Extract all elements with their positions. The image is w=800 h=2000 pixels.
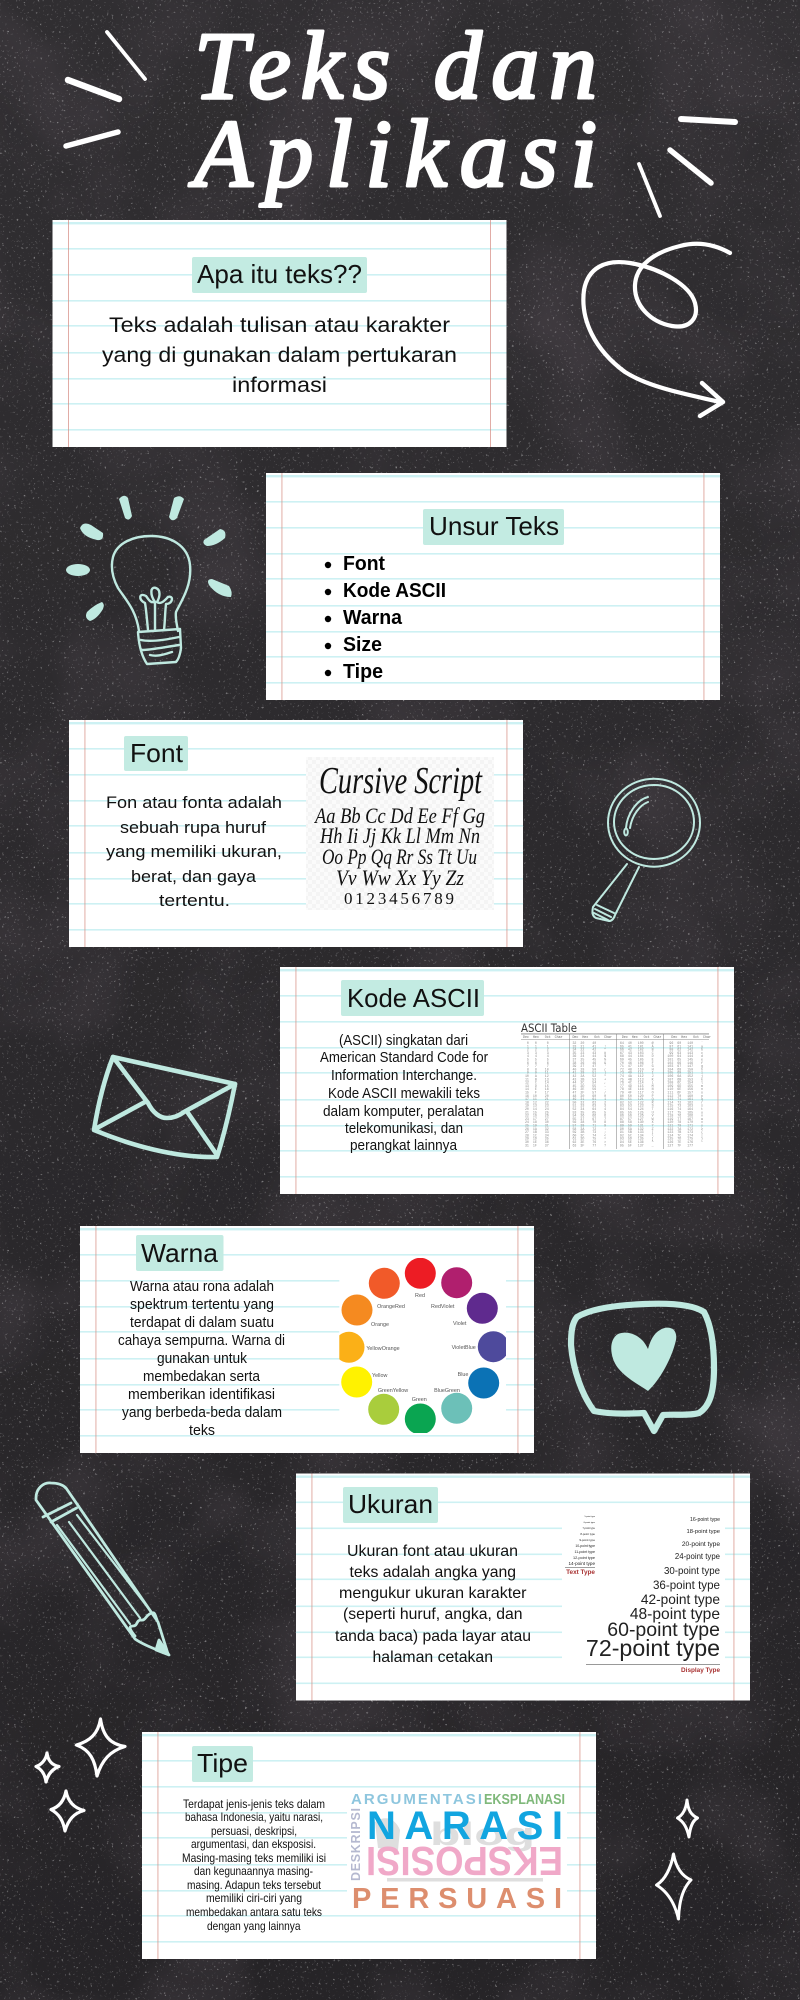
ascii table: 5 5 5 37 25 45 % 69 45 105 E 101 65 145 e xyxy=(521,1058,703,1062)
font description: tertentu. xyxy=(159,891,230,910)
cursive script specimen: Vv Ww Xx Yy Zz xyxy=(336,865,464,890)
bullet list: Kode ASCII xyxy=(343,580,446,602)
colour wheel xyxy=(334,1258,509,1434)
ascii table: 21 15 25 53 35 65 5 85 55 125 U 117 75 165 u xyxy=(521,1110,703,1114)
colour wheel: Green xyxy=(412,1397,427,1403)
warna description: teks xyxy=(189,1422,215,1439)
ascii table: 1 1 1 33 21 41 ! 65 41 101 A 97 61 141 a xyxy=(521,1044,703,1048)
ascii table: 28 1C 34 60 3C 74 < 92 5C 134 \ 124 7C 174 | xyxy=(521,1133,703,1137)
point size chart: 20-point type xyxy=(682,1541,720,1548)
ascii table: 4 4 4 36 24 44 $ 68 44 104 D 100 64 144 d xyxy=(521,1054,703,1058)
text types word cloud: DESKRIPSI xyxy=(349,1808,363,1881)
font description xyxy=(106,793,282,910)
heading: unsur teks: Unsur Teks xyxy=(429,511,559,541)
tipe description: memiliki ciri-ciri yang xyxy=(206,1891,302,1905)
swirl arrow xyxy=(583,244,730,416)
icon: light bulb xyxy=(66,496,232,664)
warna description: terdapat di dalam suatu xyxy=(130,1314,274,1331)
panel: ukuran xyxy=(296,1474,750,1700)
ascii table: Dec Hex Oct Char Dec Hex Oct Char Dec Hex Oct Char Dec Hex Oct Char xyxy=(521,1035,711,1039)
heading: font: Font xyxy=(130,738,184,768)
definition text: yang di gunakan dalam pertukaran xyxy=(102,344,457,367)
ascii table: 8 8 10 40 28 50 ( 72 48 110 H 104 68 150 h xyxy=(521,1067,703,1071)
ukuran description: Ukuran font atau ukuran xyxy=(347,1543,518,1560)
panel: unsur teks xyxy=(266,473,720,700)
point size chart: 12-point type xyxy=(573,1556,595,1560)
bullet list xyxy=(325,553,446,683)
ascii table: 26 1A 32 58 3A 72 : 90 5A 132 Z 122 7A 172 z xyxy=(521,1127,703,1131)
ascii table: 9 9 11 41 29 51 ) 73 49 111 I 105 69 151 i xyxy=(521,1071,703,1075)
font description: yang memiliki ukuran, xyxy=(106,842,282,861)
point size chart: 5-point type xyxy=(585,1515,596,1518)
ascii table: 25 19 31 57 39 71 9 89 59 131 Y 121 79 171 y xyxy=(521,1124,703,1128)
colour wheel: Violet xyxy=(453,1321,467,1327)
colour wheel: Yellow xyxy=(372,1373,387,1379)
warna description: cahaya sempurna. Warna di xyxy=(118,1332,285,1349)
colour wheel: OrangeRed xyxy=(377,1304,405,1310)
ascii table xyxy=(521,1021,711,1149)
ascii table: 7 7 7 39 27 47 ' 71 47 107 G 103 67 147 g xyxy=(521,1064,703,1068)
ascii table: 27 1B 33 59 3B 73 ; 91 5B 133 [ 123 7B 173 { xyxy=(521,1130,703,1134)
bullet list: Warna xyxy=(343,607,403,629)
ascii table: 10 A 12 42 2A 52 * 74 4A 112 J 106 6A 152 j xyxy=(521,1074,703,1078)
heading: font xyxy=(124,736,188,771)
ukuran description: halaman cetakan xyxy=(372,1649,493,1666)
ukuran description: teks adalah angka yang xyxy=(350,1564,516,1581)
colour wheel: RedViolet xyxy=(431,1304,455,1310)
cursive script specimen: 0123456789 xyxy=(344,889,454,908)
panel: tipe xyxy=(142,1732,596,1959)
ascii table: 13 D 15 45 2D 55 - 77 4D 115 M 109 6D 155 m xyxy=(521,1084,703,1088)
point size chart: 36-point type xyxy=(653,1579,720,1592)
point size chart: 60-point type xyxy=(607,1619,720,1641)
ascii table: 31 1F 37 63 3F 77 ? 95 5F 137 _ 127 7F 177 xyxy=(521,1143,693,1147)
colour wheel: VioletBlue xyxy=(452,1345,476,1351)
ascii table: 23 17 27 55 37 67 7 87 57 127 W 119 77 167 w xyxy=(521,1117,703,1121)
warna description: yang berbeda-beda dalam xyxy=(122,1404,282,1421)
warna description: gunakan untuk xyxy=(157,1350,247,1367)
text types word cloud: blog xyxy=(430,1816,535,1852)
sparkles: left cluster xyxy=(36,1719,125,1831)
chalk accent strokes: right of title xyxy=(639,119,735,216)
point size chart: Text Type xyxy=(566,1569,595,1576)
point size chart: 24-point type xyxy=(675,1552,720,1561)
point size chart xyxy=(562,1510,725,1678)
cursive script specimen: Aa Bb Cc Dd Ee Ff Gg xyxy=(313,803,485,828)
icon: heart speech bubble xyxy=(571,1304,714,1431)
ascii table: ASCII Table xyxy=(521,1021,577,1035)
ascii table: 15 F 17 47 2F 57 / 79 4F 117 O 111 6F 157 o xyxy=(521,1090,703,1094)
point size chart: Display Type xyxy=(681,1667,720,1674)
font description: sebuah rupa huruf xyxy=(120,818,266,837)
sparkles: right cluster xyxy=(656,1800,698,1919)
tipe description: masing. Adapun teks tersebut xyxy=(187,1878,322,1892)
ascii table: 30 1E 36 62 3E 76 > 94 5E 136 ^ 126 7E 176 ~ xyxy=(521,1140,703,1144)
point size chart: 11-point type xyxy=(574,1550,595,1554)
colour wheel: YellowOrange xyxy=(366,1346,400,1352)
ascii table: 3 3 3 35 23 43 # 67 43 103 C 99 63 143 c xyxy=(521,1051,703,1055)
ascii table: 0 0 0 32 20 40 64 40 100 @ 96 60 140 ` xyxy=(521,1041,703,1045)
text types word cloud xyxy=(347,1790,567,1915)
ukuran description: (seperti huruf, angka, dan xyxy=(343,1606,522,1623)
point size chart: 42-point type xyxy=(641,1592,720,1607)
tipe description: dan kegunaannya masing- xyxy=(194,1864,313,1878)
colour wheel: Blue xyxy=(458,1372,468,1378)
tipe description: Masing-masing teks memiliki isi xyxy=(182,1851,326,1865)
ascii description: dalam komputer, peralatan xyxy=(323,1103,484,1120)
definition text xyxy=(102,314,457,397)
icon: magnifying glass xyxy=(592,779,700,921)
heading: kode ascii: Kode ASCII xyxy=(347,983,480,1013)
heading: tipe xyxy=(192,1746,253,1782)
title: Teks dan xyxy=(194,12,597,119)
ascii table: 17 11 21 49 31 61 1 81 51 121 Q 113 71 161 q xyxy=(521,1097,703,1101)
ascii description: (ASCII) singkatan dari xyxy=(339,1032,468,1049)
text types word cloud: EKSPOSISI xyxy=(366,1838,563,1884)
ascii description: Kode ASCII mewakili teks xyxy=(328,1085,480,1102)
heading: warna: Warna xyxy=(141,1238,219,1268)
ascii description: telekomunikasi, dan xyxy=(345,1120,463,1137)
tipe description: Terdapat jenis-jenis teks dalam xyxy=(183,1797,325,1811)
point size chart: 14-point type xyxy=(568,1561,595,1566)
ascii table: 2 2 2 34 22 42 " 66 42 102 B 98 62 142 b xyxy=(521,1048,703,1052)
ukuran description xyxy=(335,1543,531,1666)
font description: Fon atau fonta adalah xyxy=(106,793,282,812)
text types word cloud: NARASI xyxy=(367,1804,563,1848)
definition text: informasi xyxy=(232,374,327,397)
text types word cloud: PERSUASI xyxy=(352,1883,562,1915)
ascii table: 14 E 16 46 2E 56 . 78 4E 116 N 110 6E 156 n xyxy=(521,1087,703,1091)
tipe description: membedakan antara satu teks xyxy=(186,1905,322,1919)
tipe description: persuasi, deskripsi, xyxy=(211,1824,297,1838)
icon: pencil xyxy=(36,1483,169,1655)
ascii table: 11 B 13 43 2B 53 + 75 4B 113 K 107 6B 153 k xyxy=(521,1077,703,1081)
title xyxy=(188,12,597,207)
panel: apa itu teks xyxy=(52,220,506,447)
point size chart: 6-point type xyxy=(584,1521,596,1524)
point size chart: 10-point type xyxy=(575,1544,595,1548)
tipe description: bahasa Indonesia, yaitu narasi, xyxy=(185,1810,323,1824)
point size chart: 8-point type xyxy=(580,1532,595,1536)
colour wheel: Orange xyxy=(371,1322,389,1328)
point size chart: 72-point type xyxy=(586,1635,720,1661)
warna description xyxy=(118,1278,285,1439)
ascii table: 18 12 22 50 32 62 2 82 52 122 R 114 72 162 r xyxy=(521,1100,703,1104)
heading: ukuran: Ukuran xyxy=(348,1489,433,1519)
warna description: memberikan identifikasi xyxy=(128,1386,275,1403)
panel: kode ascii xyxy=(280,967,734,1194)
ascii table: 29 1D 35 61 3D 75 = 93 5D 135 ] 125 7D 175 } xyxy=(521,1137,703,1141)
bullet list: Size xyxy=(343,634,382,656)
definition text: Teks adalah tulisan atau karakter xyxy=(109,314,450,337)
ascii description xyxy=(320,1032,488,1154)
ascii description: American Standard Code for xyxy=(320,1049,488,1066)
panel: warna xyxy=(80,1226,534,1453)
title: Aplikasi xyxy=(188,100,597,207)
colour wheel: GreenYellow xyxy=(378,1388,408,1394)
colour wheel: BlueGreen xyxy=(434,1388,460,1394)
ascii table: 19 13 23 51 33 63 3 83 53 123 S 115 73 163 s xyxy=(521,1104,703,1108)
point size chart: 48-point type xyxy=(630,1606,720,1623)
cursive script specimen xyxy=(306,757,494,910)
ascii table: 20 14 24 52 34 64 4 84 54 124 T 116 74 164 t xyxy=(521,1107,703,1111)
ascii table: 6 6 6 38 26 46 & 70 46 106 F 102 66 146 f xyxy=(521,1061,703,1065)
heading: tipe: Tipe xyxy=(197,1748,248,1778)
ascii table: 22 16 26 54 36 66 6 86 56 126 V 118 76 166 v xyxy=(521,1114,703,1118)
colour wheel: Red xyxy=(415,1293,425,1299)
ukuran description: mengukur ukuran karakter xyxy=(339,1585,527,1602)
warna description: spektrum tertentu yang xyxy=(130,1296,274,1313)
cursive script specimen: Oo Pp Qq Rr Ss Tt Uu xyxy=(322,844,477,869)
tipe description: argumentasi, dan eksposisi. xyxy=(191,1837,316,1851)
tipe description xyxy=(182,1797,326,1933)
bullet list: Tipe xyxy=(343,661,383,683)
bullet list: Font xyxy=(343,553,385,575)
heading: apa itu teks: Apa itu teks?? xyxy=(197,259,362,289)
ascii table: 24 18 30 56 38 70 8 88 58 130 X 120 78 170 x xyxy=(521,1120,703,1124)
icon: envelope xyxy=(94,1057,235,1157)
ascii description: Information Interchange. xyxy=(331,1067,477,1084)
point size chart: 18-point type xyxy=(686,1529,720,1535)
point size chart: 9-point type xyxy=(579,1538,595,1542)
ukuran description: tanda baca) pada layar atau xyxy=(335,1628,531,1645)
chalk accent strokes: left of title xyxy=(66,32,145,146)
warna description: Warna atau rona adalah xyxy=(130,1278,274,1295)
ascii table: 16 10 20 48 30 60 0 80 50 120 P 112 70 160 p xyxy=(521,1094,703,1098)
cursive script specimen: Hh Ii Jj Kk Ll Mm Nn xyxy=(319,823,480,848)
panel: font xyxy=(69,720,523,947)
text types word cloud: EKSPLANASI xyxy=(484,1792,565,1808)
font description: berat, dan gaya xyxy=(131,867,257,886)
point size chart: 7-point type xyxy=(582,1527,596,1530)
warna description: membedakan serta xyxy=(143,1368,261,1385)
ascii table: 12 C 14 44 2C 54 , 76 4C 114 L 108 6C 154 l xyxy=(521,1081,703,1085)
point size chart: 16-point type xyxy=(690,1517,720,1523)
text types word cloud: ARGUMENTASI xyxy=(351,1791,482,1808)
point size chart: 30-point type xyxy=(664,1566,720,1577)
tipe description: dengan yang lainnya xyxy=(207,1919,301,1933)
ascii description: perangkat lainnya xyxy=(350,1137,458,1154)
cursive script specimen: Cursive Script xyxy=(319,760,483,802)
